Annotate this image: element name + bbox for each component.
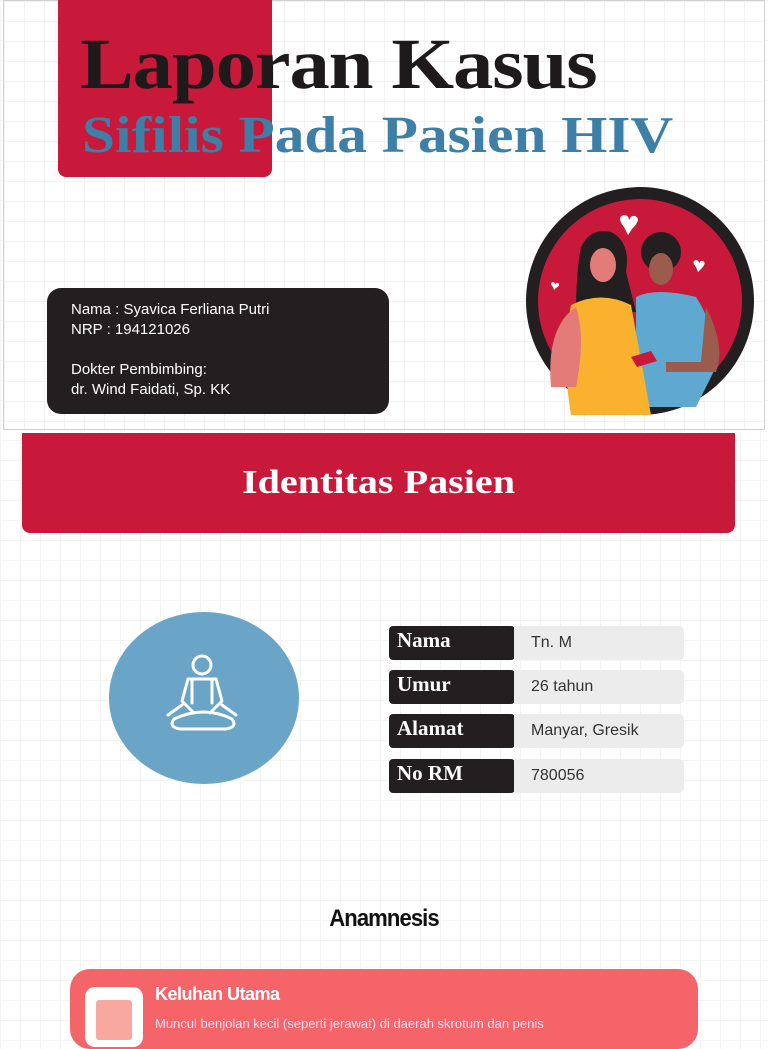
text: Nama [397,628,451,652]
text: Manyar, Gresik [531,722,639,739]
illustration: couple [526,187,754,415]
info box: Nama : Syavica Ferliana Putri [71,301,269,318]
slide: title [3,0,765,430]
info box: dr. Wind Faidati, Sp. KK [71,381,230,398]
text: Alamat [397,716,464,740]
text: Umur [397,672,451,696]
title: Laporan Kasus [80,24,596,104]
info box [47,288,389,414]
header: Identitas Pasien [22,433,735,533]
text: Tn. M [531,634,572,651]
icon: patient meditation circle [109,612,299,784]
card: Keluhan Utama [70,969,698,1049]
info box: NRP : 194121026 [71,321,190,338]
text: No RM [397,761,463,785]
text: 780056 [531,767,584,784]
red accent block [58,0,272,177]
card text: Muncul benjolan kecil (seperti jerawat) di daerah skrotum dan penis [155,1016,544,1031]
table: patient identity [389,626,684,793]
info box: Dokter Pembimbing: [71,361,207,378]
heading: Anamnesis: Anamnesis [329,905,439,932]
text: 26 tahun [531,678,593,695]
card title: Keluhan Utama [155,984,280,1004]
icon: document [85,987,143,1047]
subtitle: Sifilis Pada Pasien HIV [82,107,673,164]
header: Identitas Pasien: Identitas Pasien [242,464,515,501]
